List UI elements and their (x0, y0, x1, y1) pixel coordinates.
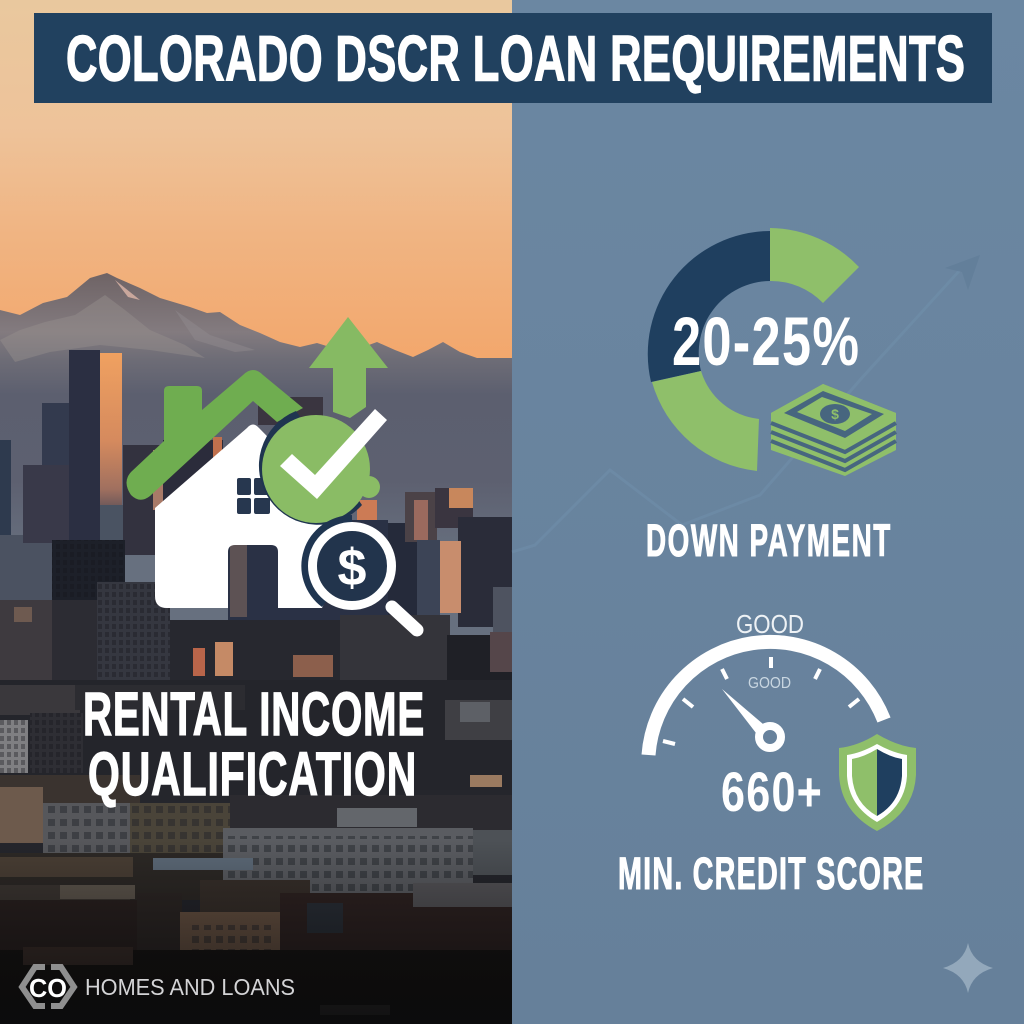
chart: credit score gauge (648, 609, 884, 755)
logo: CO Homes and Loans (22, 967, 295, 1006)
label: gauge good: GOOD (748, 675, 791, 692)
panel: right blue background (512, 0, 1024, 1024)
title banner: COLORADO DSCR LOAN REQUIREMENTS (66, 22, 965, 95)
panel: left city skyline photo (0, 0, 512, 1024)
icon: stack of money (771, 384, 896, 476)
icon: growth arrow (309, 317, 388, 418)
icon: green roof (126, 370, 303, 500)
icon: white house (155, 424, 330, 608)
logo: CO Homes and Loans: CO (29, 973, 67, 1003)
icon: sparkle (943, 943, 993, 993)
icon: needle (722, 689, 781, 748)
icon: stack of money: $ (831, 406, 839, 422)
icon: green check circle (259, 409, 387, 525)
stat: 660+: 660+ (721, 761, 822, 823)
icon: magnifier with dollar: $ (338, 539, 367, 597)
label: good: GOOD (736, 609, 804, 639)
icon: shield (839, 734, 916, 831)
heading: rental income qualification (83, 680, 424, 809)
stat: 20-25%: 20-25% (672, 303, 859, 380)
icon: rental income house with check and magnifier (126, 317, 417, 630)
icon: magnifier with dollar (301, 515, 417, 630)
heading: rental income qualification: RENTAL INCOME (83, 680, 424, 748)
heading: rental income qualification: QUALIFICATION (88, 741, 416, 809)
logo: CO Homes and Loans: HOMES AND LOANS (85, 974, 295, 1000)
icon: house window (237, 478, 270, 514)
label: down payment: DOWN PAYMENT (646, 515, 890, 566)
chart: down payment donut (648, 228, 859, 471)
label: min credit score: MIN. CREDIT SCORE (618, 850, 923, 900)
